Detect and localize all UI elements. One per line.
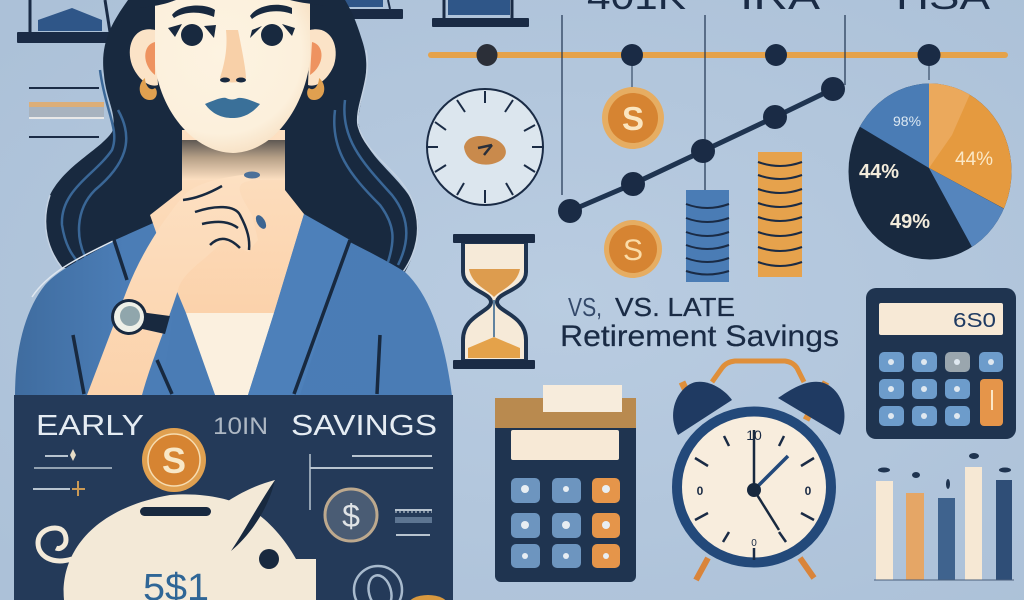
nose bbox=[220, 30, 246, 82]
hair bbox=[46, 0, 418, 272]
eye bbox=[259, 549, 279, 569]
title: VS. LATE bbox=[615, 292, 735, 322]
icon: hourglass bbox=[453, 234, 535, 369]
clock hands bbox=[753, 430, 755, 490]
ear bbox=[228, 480, 275, 551]
piggy coin: S bbox=[162, 440, 186, 481]
small coin bbox=[325, 489, 377, 541]
piggy coin bbox=[142, 428, 206, 492]
pie labels: 44% bbox=[955, 149, 993, 170]
small bottom coin bbox=[408, 595, 448, 600]
icon: clock dial bbox=[426, 89, 544, 205]
icon: right calculator bbox=[866, 288, 1016, 439]
ears bbox=[130, 29, 158, 86]
face bbox=[155, 0, 310, 153]
bar chart bbox=[874, 453, 1014, 580]
small chart lines bbox=[33, 449, 433, 535]
icon: alarm clock: 0 bbox=[751, 538, 757, 549]
panel heading: EARLY bbox=[36, 410, 144, 442]
pie labels: 49% bbox=[890, 211, 930, 233]
title: VS, bbox=[568, 292, 602, 322]
icon: left calculator bbox=[495, 385, 636, 582]
swirl icon bbox=[354, 566, 402, 600]
slot bbox=[140, 507, 211, 516]
panel heading bbox=[36, 410, 437, 442]
top left shelf icons bbox=[17, 0, 529, 43]
timeline bbox=[428, 15, 1008, 195]
panel heading: 10IN bbox=[213, 413, 268, 440]
stacked coins: orange bbox=[758, 152, 802, 277]
eyes bbox=[181, 24, 203, 46]
pie labels: 98% bbox=[893, 113, 921, 129]
woman figure bbox=[15, 0, 452, 396]
icon: dollar coin lower bbox=[604, 220, 662, 278]
icon: alarm clock: 0 bbox=[805, 484, 812, 498]
column titles bbox=[587, 0, 990, 17]
top bbox=[186, 313, 274, 395]
title: Retirement Savings bbox=[560, 320, 839, 353]
pie chart bbox=[848, 84, 1012, 260]
icon: alarm clock bbox=[673, 361, 844, 580]
keypad bbox=[879, 352, 1003, 426]
earrings bbox=[140, 78, 157, 100]
neck and chest bbox=[150, 130, 304, 313]
stacked coins: blue bbox=[686, 190, 729, 282]
icon: dollar coin upper: S bbox=[622, 100, 644, 137]
wristwatch bbox=[111, 299, 170, 335]
icon: dollar coin upper bbox=[602, 87, 664, 149]
icon: dollar coin lower: S bbox=[623, 234, 643, 267]
tail bbox=[38, 528, 72, 561]
icon: right calculator: 6S0 bbox=[953, 310, 996, 332]
hair fringe bbox=[140, 0, 176, 8]
jacket bbox=[15, 212, 452, 396]
left wall lines bbox=[29, 87, 104, 138]
panel heading: SAVINGS bbox=[291, 410, 437, 442]
eyebrows bbox=[172, 6, 215, 18]
piggy bank bbox=[38, 480, 316, 600]
small coin: $ bbox=[342, 498, 360, 534]
icon: alarm clock: 10 bbox=[746, 427, 762, 443]
mouth bbox=[205, 98, 260, 118]
arm and hand bbox=[87, 174, 258, 395]
icon: alarm clock: 0 bbox=[697, 484, 704, 498]
panel: early savings bbox=[14, 395, 453, 600]
clock ticks bbox=[695, 436, 814, 560]
pie labels bbox=[859, 113, 993, 233]
keypad bbox=[511, 478, 620, 568]
title bbox=[560, 292, 839, 353]
pie labels: 44% bbox=[859, 161, 899, 183]
line chart bbox=[558, 77, 845, 223]
lapels bbox=[160, 290, 215, 395]
